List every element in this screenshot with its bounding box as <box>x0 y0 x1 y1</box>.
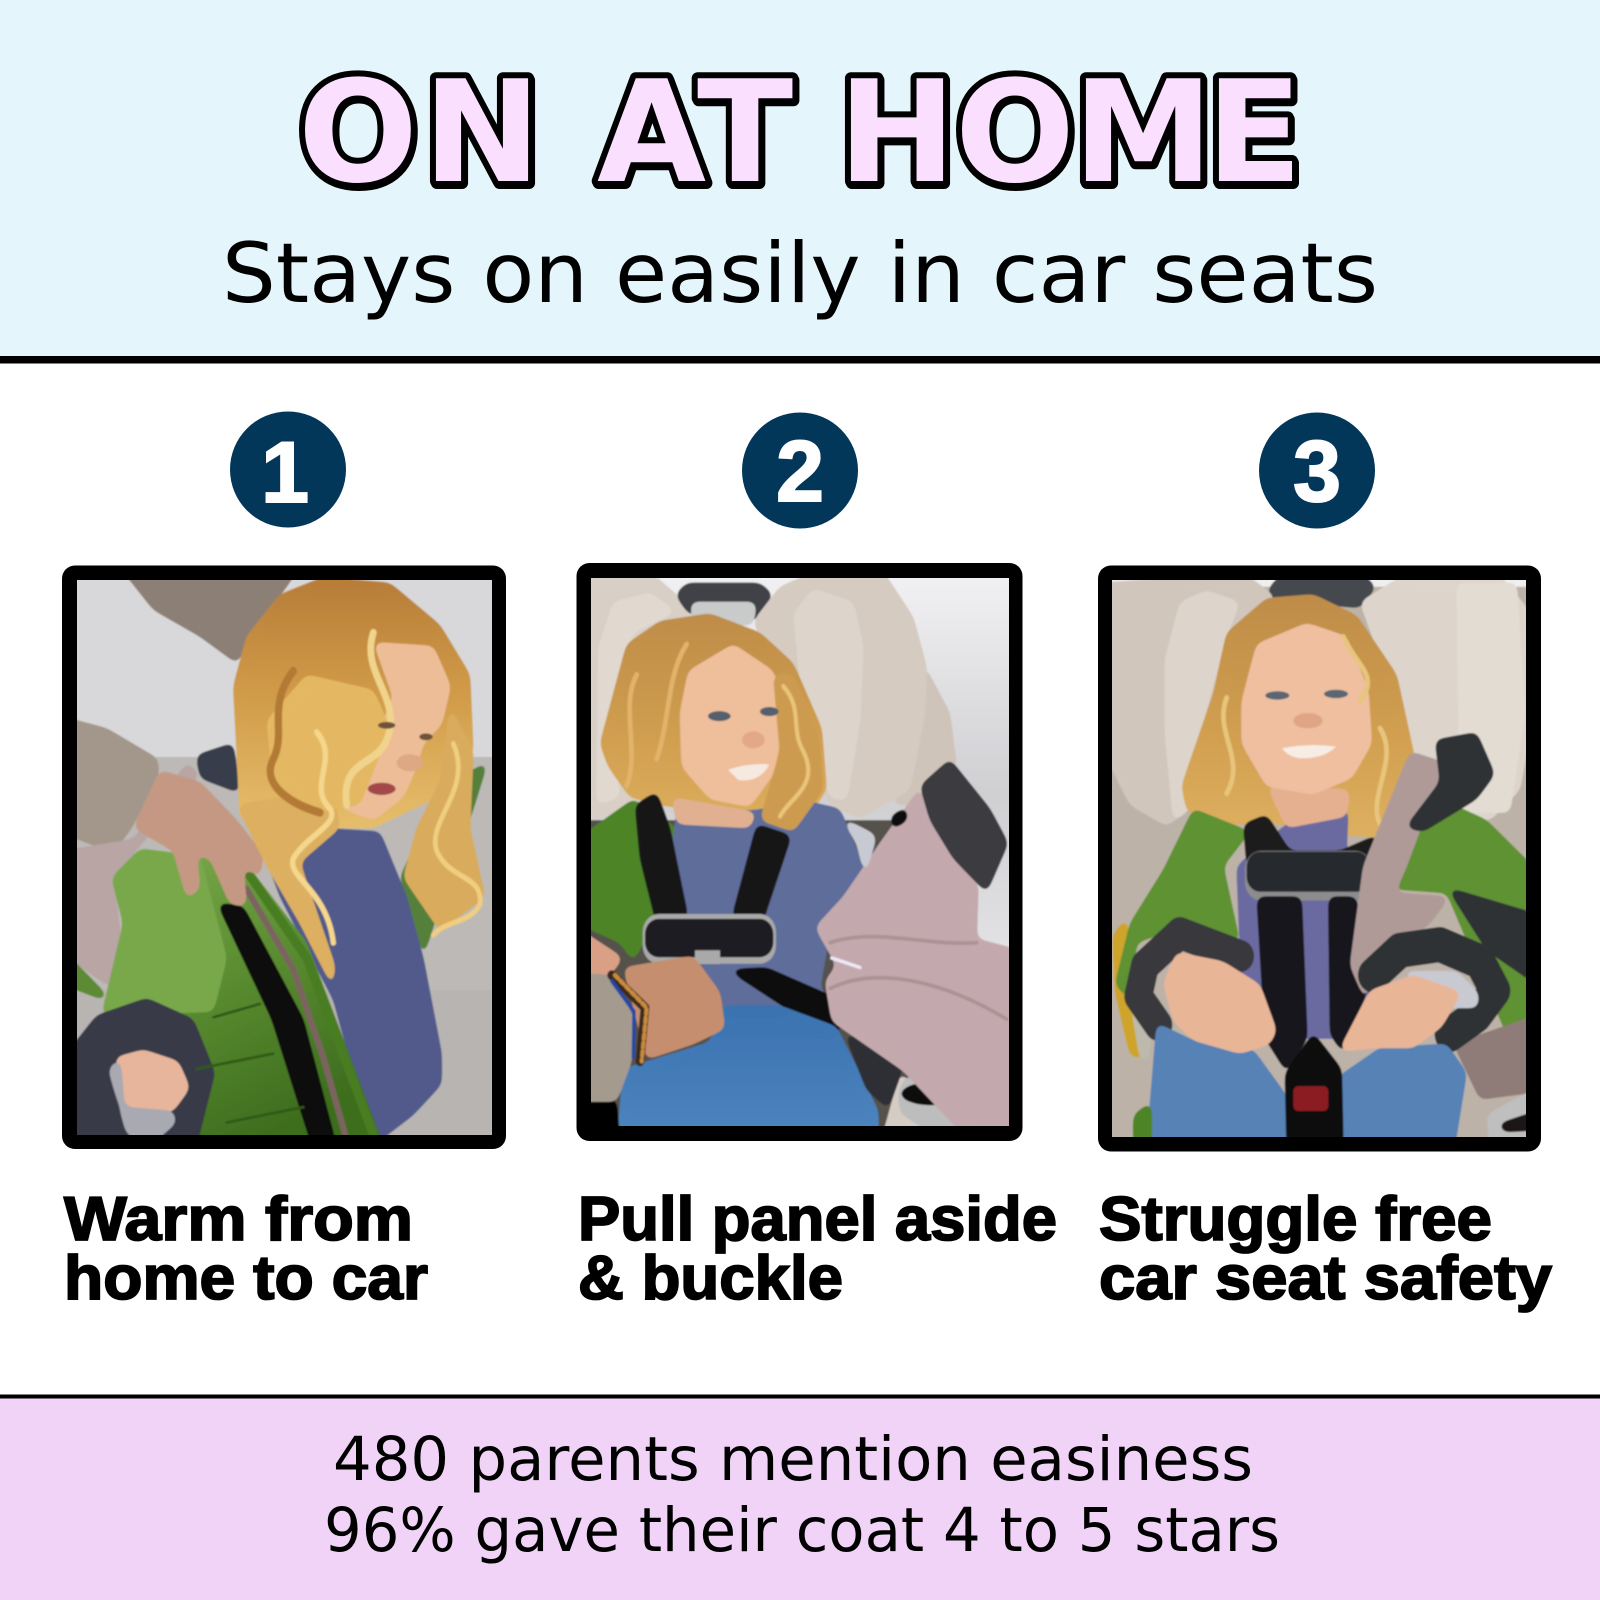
step badge 1 <box>230 412 346 528</box>
caption 1 <box>64 1185 428 1313</box>
step badge 2: 2 <box>776 424 824 520</box>
footer panel <box>0 1394 1600 1600</box>
photo panel 2: child in car seat with panel pulled aside <box>576 563 1022 1145</box>
step badge 3 <box>1259 412 1375 528</box>
footer text: 480 parents mention easiness <box>333 1424 1253 1495</box>
step badge 2 <box>742 412 858 528</box>
caption 3: car seat safety <box>1099 1244 1553 1313</box>
caption 3 <box>1099 1185 1553 1313</box>
photo panel 3: smiling child buckled in car seat <box>1098 566 1541 1152</box>
title: ON AT HOME <box>298 51 1302 215</box>
step badge 3: 3 <box>1293 424 1341 520</box>
subtitle: Stays on easily in car seats <box>222 225 1378 322</box>
caption 3: Struggle free <box>1099 1185 1492 1254</box>
caption 2: & buckle <box>578 1244 843 1313</box>
footer text <box>324 1424 1280 1566</box>
header panel <box>0 0 1600 364</box>
caption 2 <box>578 1185 1057 1313</box>
step badge 1: 1 <box>261 425 309 521</box>
caption 2: Pull panel aside <box>578 1185 1057 1254</box>
footer text: 96% gave their coat 4 to 5 stars <box>324 1495 1280 1566</box>
caption 1: home to car <box>64 1244 428 1313</box>
caption 1: Warm from <box>64 1185 413 1254</box>
photo panel 1: parent helping child into green coat <box>62 566 506 1149</box>
